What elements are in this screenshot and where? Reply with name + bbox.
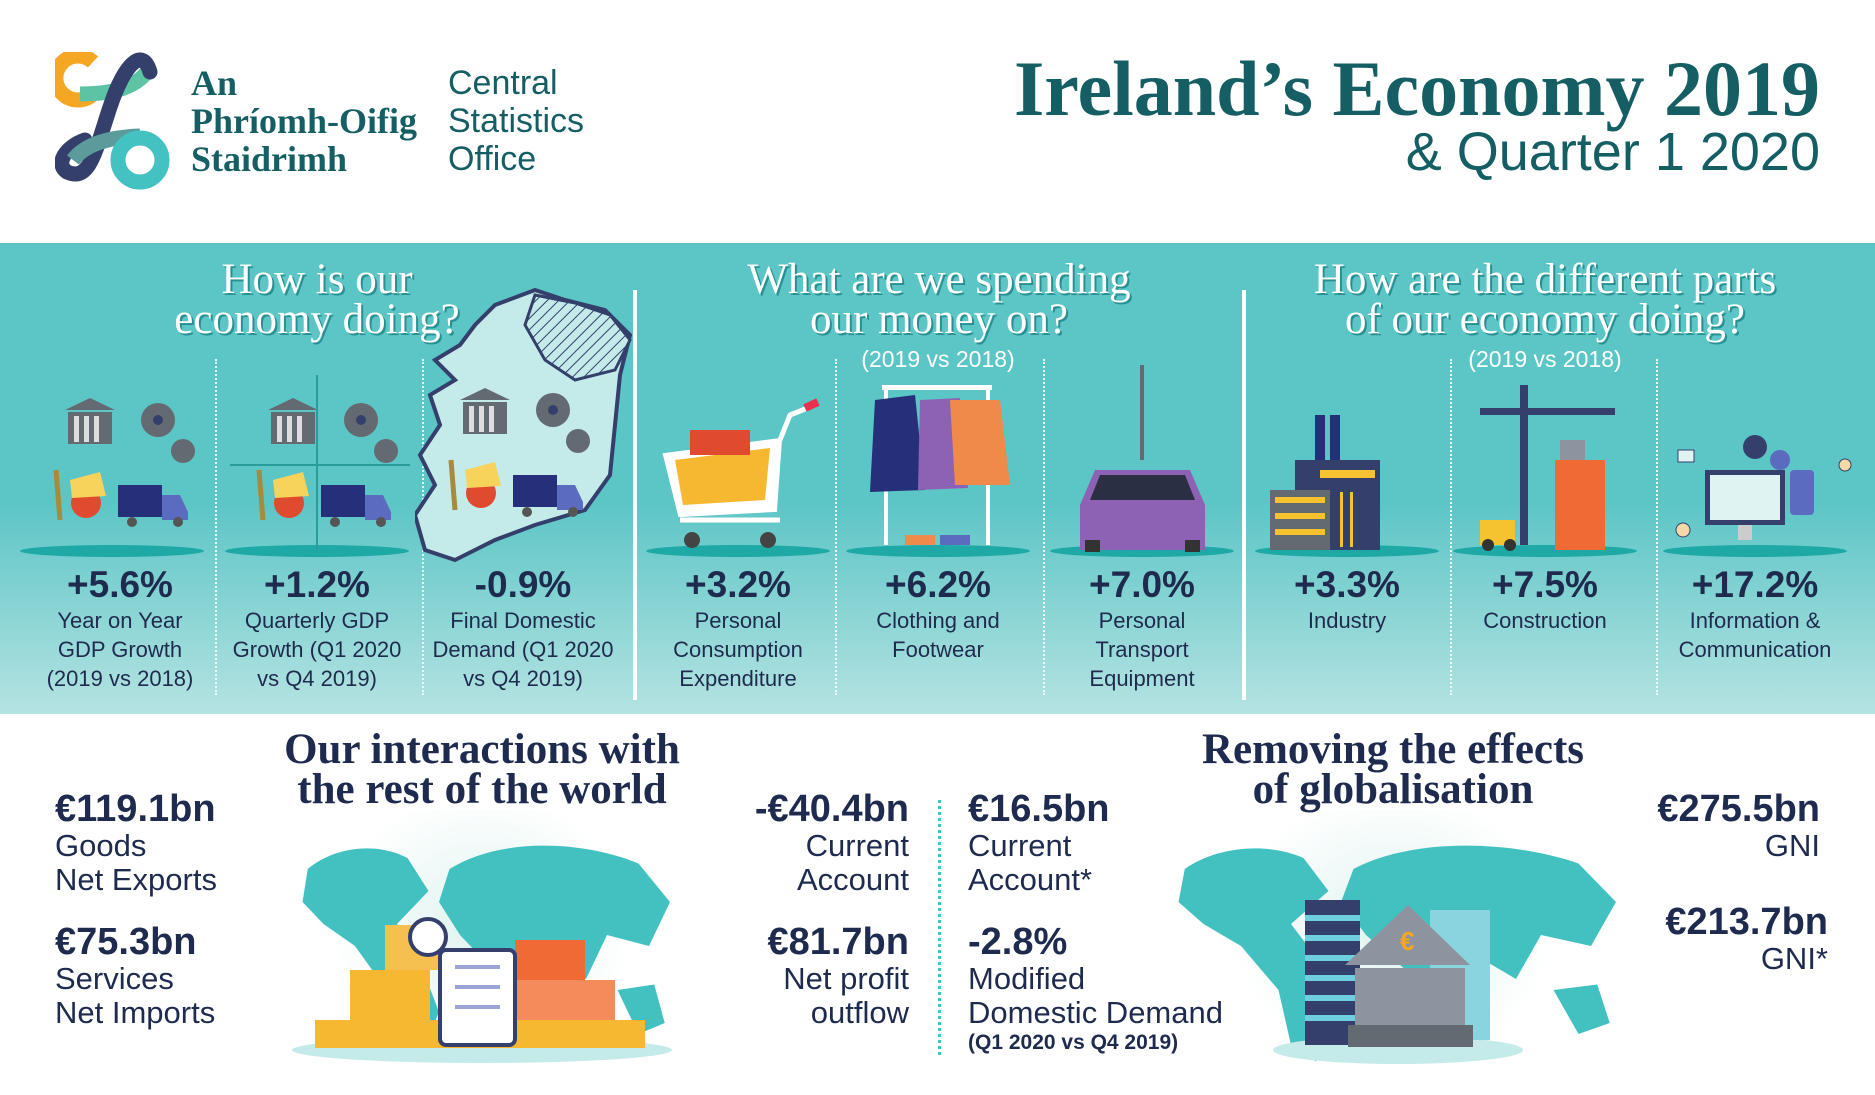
stat: transport: Transport	[1095, 637, 1189, 662]
heading: globalisation	[1202, 726, 1584, 813]
logo text: English name: Office	[448, 140, 536, 178]
stat: goods net exports	[55, 788, 217, 897]
subtitle: & Quarter 1 2020	[1406, 122, 1820, 182]
world maps: €	[1400, 926, 1414, 956]
stat: industry: +3.3%	[1294, 564, 1400, 605]
stat: clothing: Footwear	[892, 637, 984, 662]
heading: economy: economy doing?	[174, 296, 460, 343]
heading: parts: of our economy doing?	[1345, 296, 1745, 343]
stat: industry	[1294, 564, 1400, 633]
stat: services net imports: €75.3bn	[55, 921, 197, 963]
stat: final domestic demand: vs Q4 2019)	[463, 666, 583, 691]
stat: services net imports: Net Imports	[55, 995, 215, 1030]
stat: current account: -€40.4bn	[755, 788, 909, 830]
stat: modified domestic demand: Domestic Demand	[968, 995, 1223, 1030]
stat: modified current account: €16.5bn	[968, 788, 1110, 830]
stat: GNI: €275.5bn	[1657, 788, 1820, 830]
heading: parts	[1314, 256, 1777, 344]
stat: transport: Equipment	[1089, 666, 1195, 691]
heading: spending	[747, 256, 1132, 344]
heading: economy: How is our	[221, 256, 413, 303]
heading: globalisation: Removing the effects	[1202, 726, 1584, 773]
stat: consumption	[673, 564, 803, 691]
stat: goods net exports: Net Exports	[55, 862, 217, 897]
logo text: English name: Central	[448, 64, 558, 102]
stat: construction	[1483, 564, 1607, 633]
stat: ICT: +17.2%	[1692, 564, 1818, 605]
stat: GNI: GNI	[1765, 828, 1820, 863]
title: Ireland’s Economy 2019	[1014, 45, 1820, 132]
divider dotted	[938, 800, 941, 1055]
stat: clothing: +6.2%	[885, 564, 991, 605]
stat: current account: Current	[806, 828, 909, 863]
stat: GNI*	[1665, 901, 1828, 976]
stat: net profit outflow	[767, 921, 910, 1030]
logo	[55, 52, 170, 190]
stat: modified domestic demand: -2.8%	[968, 921, 1067, 963]
logo text: Irish name: An	[191, 63, 237, 103]
stat: services net imports	[55, 921, 215, 1030]
stat: GNI	[1657, 788, 1820, 863]
stat: GDP growth	[47, 564, 193, 691]
stat: quarterly GDP: +1.2%	[264, 564, 370, 605]
stat: modified domestic demand: (Q1 2020 vs Q4 2019)	[968, 1031, 1178, 1054]
teal band	[0, 243, 1875, 714]
stat: ICT: Communication	[1679, 637, 1831, 662]
logo text: English name	[448, 64, 584, 178]
stat: clothing: Clothing and	[876, 608, 1000, 633]
stat: construction: +7.5%	[1492, 564, 1598, 605]
stat: goods net exports: €119.1bn	[55, 788, 216, 830]
stat: current account: Account	[797, 862, 909, 897]
stat: industry: Industry	[1308, 608, 1386, 633]
stat: quarterly GDP	[233, 564, 401, 691]
section separators	[633, 290, 637, 700]
stat: goods net exports: Goods	[55, 828, 146, 863]
stat: construction: Construction	[1483, 608, 1607, 633]
stat: modified domestic demand	[968, 921, 1223, 1054]
stat: services net imports: Services	[55, 961, 174, 996]
stat: GDP growth: +5.6%	[67, 564, 173, 605]
heading: interactions	[284, 726, 680, 813]
stat: GDP growth: Year on Year	[57, 608, 183, 633]
heading: spending: What are we spending	[747, 256, 1131, 303]
logo text: Irish name: Phríomh-Oifig	[191, 101, 417, 141]
stat: consumption: Personal	[695, 608, 781, 633]
stat: consumption: Expenditure	[679, 666, 797, 691]
stat: net profit outflow: €81.7bn	[767, 921, 909, 963]
stat: ICT	[1679, 564, 1831, 662]
stat: transport	[1089, 564, 1195, 691]
stat: consumption: Consumption	[673, 637, 803, 662]
icon: ireland map	[415, 288, 632, 562]
stat: consumption: +3.2%	[685, 564, 791, 605]
stat: final domestic demand	[432, 564, 614, 691]
heading: parts: How are the different parts	[1314, 256, 1776, 303]
heading: interactions: Our interactions with	[284, 726, 680, 773]
stat: net profit outflow: outflow	[811, 995, 909, 1030]
world maps	[292, 826, 1616, 1064]
subheading: 2019 vs 2018 (parts): (2019 vs 2018)	[1468, 346, 1622, 372]
stat: clothing	[876, 564, 1000, 662]
stat: transport: +7.0%	[1089, 564, 1195, 605]
stat: GDP growth: GDP Growth	[58, 637, 182, 662]
icons row	[20, 365, 1852, 557]
stat: final domestic demand: -0.9%	[475, 564, 571, 605]
logo text: Irish name: Staidrimh	[191, 139, 347, 179]
stat: quarterly GDP: vs Q4 2019)	[257, 666, 377, 691]
stat: GDP growth: (2019 vs 2018)	[47, 666, 193, 691]
stat: modified domestic demand: Modified	[968, 961, 1085, 996]
heading: economy	[174, 256, 460, 344]
stat: quarterly GDP: Quarterly GDP	[245, 608, 389, 633]
stat: GNI*: €213.7bn	[1665, 901, 1828, 943]
heading: spending: our money on?	[810, 296, 1068, 343]
stat: GNI*: GNI*	[1761, 941, 1828, 976]
stat: modified current account: Current	[968, 828, 1071, 863]
logo text: Irish name	[191, 63, 417, 179]
stat: transport: Personal	[1099, 608, 1185, 633]
logo text: English name: Statistics	[448, 102, 584, 140]
stat: quarterly GDP: Growth (Q1 2020	[233, 637, 401, 662]
heading: globalisation: of globalisation	[1253, 766, 1533, 813]
stat: modified current account: Account*	[968, 862, 1092, 897]
stat: final domestic demand: Final Domestic	[450, 608, 596, 633]
stat: ICT: Information &	[1690, 608, 1820, 633]
stat: modified current account	[968, 788, 1110, 897]
stat: net profit outflow: Net profit	[783, 961, 909, 996]
stat: current account	[755, 788, 909, 897]
stat: final domestic demand: Demand (Q1 2020	[432, 637, 614, 662]
heading: interactions: the rest of the world	[297, 766, 667, 813]
subheading: 2019 vs 2018: (2019 vs 2018)	[861, 346, 1015, 372]
